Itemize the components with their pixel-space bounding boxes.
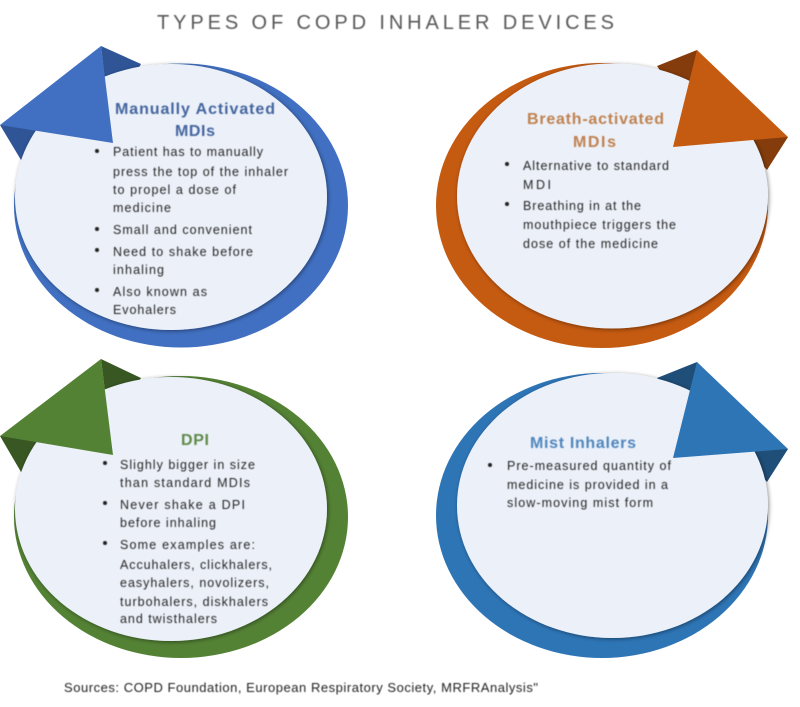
arrow fold top (101, 46, 141, 100)
bullet list: to propel a dose of (113, 183, 237, 197)
bullet list: medicine (113, 201, 171, 215)
outer ring (436, 63, 768, 348)
bullet list: inhaling (113, 263, 164, 277)
bullet list: Patient has to manually (113, 145, 264, 159)
bullet list: Evohalers (113, 303, 176, 317)
bullet list: Some examples are: (120, 538, 255, 552)
bullet list: easyhalers, novolizers, (120, 576, 269, 590)
bullet list: dose of the medicine (523, 237, 658, 251)
bullet list: Slighly bigger in size (120, 458, 255, 472)
arrow head (673, 50, 788, 147)
heading: MDIs (573, 134, 616, 151)
arrow fold right (745, 130, 788, 170)
arrow fold left (0, 436, 50, 472)
outer ring (14, 64, 348, 348)
panel text (488, 435, 672, 510)
bullet list (505, 159, 676, 251)
heading: MDIs (175, 123, 215, 140)
bullet list: Also known as (113, 285, 207, 299)
bullet list: Breathing in at the (523, 199, 641, 213)
panel text (95, 101, 288, 317)
source note: Sources: COPD Foundation, European Respiratory Society, MRFRAnalysis" (64, 680, 538, 695)
arrow head (673, 362, 788, 458)
panel: Breath-activated MDIs (436, 50, 788, 348)
panel text (103, 432, 272, 626)
outer ring (14, 376, 348, 658)
panel: Mist Inhalers (436, 362, 788, 658)
arrow fold top (101, 359, 141, 410)
bullet list: before inhaling (120, 516, 216, 530)
inner disc (15, 64, 327, 330)
panel text (505, 111, 676, 251)
inner disc (457, 373, 768, 638)
outer ring (436, 373, 768, 658)
arrow head (0, 46, 113, 143)
title: TYPES OF COPD INHALER DEVICES (157, 12, 614, 34)
bullet list: than standard MDIs (120, 476, 250, 490)
panel: Manually Activated MDIs (0, 46, 348, 348)
bullet list: and twisthalers (120, 612, 217, 626)
bullet list: Never shake a DPI (120, 498, 245, 512)
bullet list: Small and convenient (113, 223, 253, 237)
panel: DPI (0, 359, 348, 658)
arrow fold left (0, 125, 50, 160)
bullet list (488, 459, 672, 510)
bullet list: press the top of the inhaler (113, 165, 288, 179)
heading: Mist Inhalers (530, 435, 636, 452)
bullet list: Alternative to standard (523, 159, 669, 173)
arrow fold right (745, 442, 788, 482)
arrow head (0, 359, 113, 455)
bullet list: turbohalers, diskhalers (120, 595, 268, 609)
bullet list (95, 145, 288, 317)
bullet list: MDI (523, 178, 551, 192)
arrow fold top (657, 50, 697, 100)
bullet list (103, 458, 272, 626)
bullet list: Pre-measured quantity of (507, 459, 672, 473)
heading: Breath-activated (527, 111, 664, 128)
inner disc (457, 64, 768, 328)
bullet list: slow-moving mist form (507, 496, 653, 510)
heading: Manually Activated (115, 101, 275, 118)
heading: DPI (181, 432, 209, 449)
heading (527, 111, 664, 151)
bullet list: medicine is provided in a (507, 478, 668, 492)
inner disc (15, 377, 327, 641)
bullet list: Need to shake before (113, 245, 253, 259)
bullet list: mouthpiece triggers the (523, 218, 676, 232)
heading (115, 101, 275, 140)
bullet list: Accuhalers, clickhalers, (120, 558, 272, 572)
arrow fold top (657, 362, 697, 410)
